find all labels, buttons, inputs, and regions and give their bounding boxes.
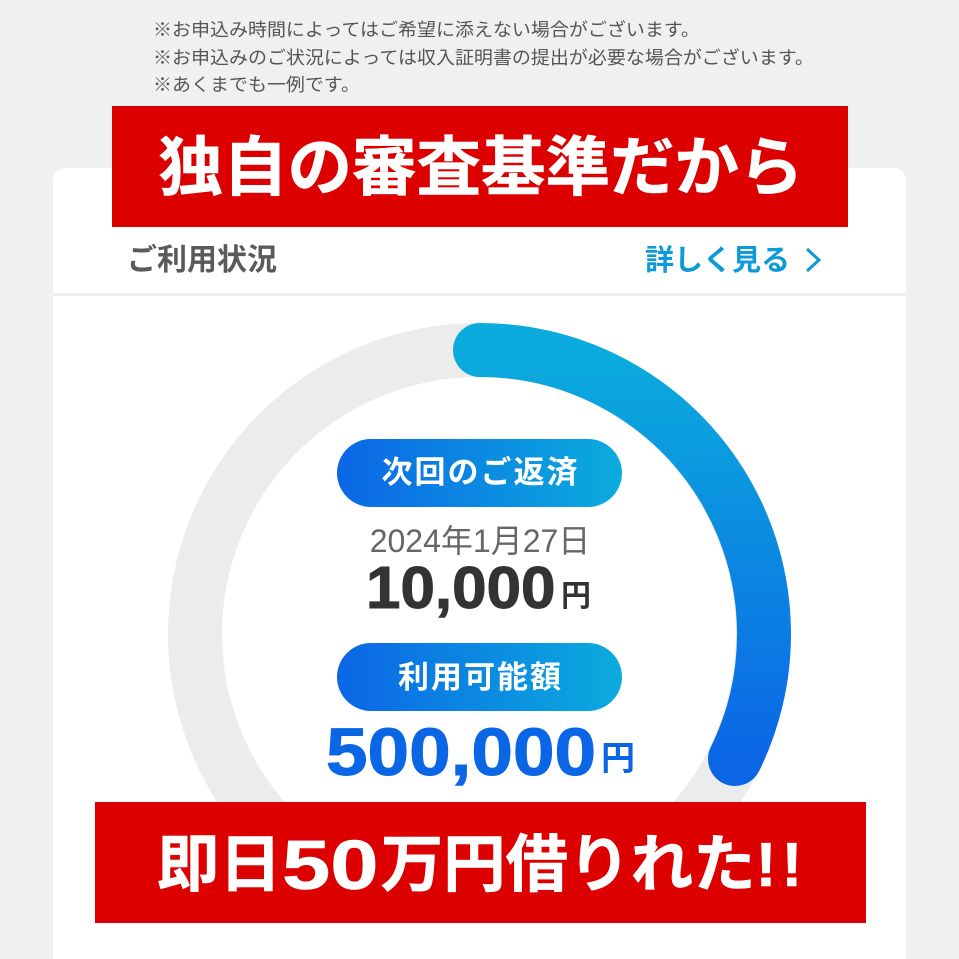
heading: usage status: ご利用状況	[127, 244, 277, 277]
pill: next repayment: 次回のご返済	[382, 455, 580, 490]
divider	[53, 293, 906, 296]
link: see details: 詳しく見る	[645, 245, 790, 277]
notes: disclaimers: ※お申込み時間によってはご希望に添えない場合がございます。	[153, 20, 700, 40]
notes: disclaimers: ※お申込みのご状況によっては収入証明書の提出が必要な場合がございます。	[153, 48, 814, 68]
banner: top headline: 独自の審査基準だから	[158, 132, 804, 204]
banner: top headline	[112, 106, 848, 227]
text: available amount: 円	[601, 740, 635, 778]
pill: next repayment	[337, 439, 622, 507]
icon: chevron	[806, 248, 822, 272]
text: repayment amount: 円	[561, 580, 591, 613]
banner: bottom headline: 50	[282, 826, 378, 904]
notes: disclaimers: ※あくまでも一例です。	[153, 75, 360, 95]
notes: disclaimers	[153, 20, 814, 95]
text: available amount: 500,000	[326, 715, 596, 790]
pill: available amount	[337, 643, 622, 711]
panel: usage card	[53, 168, 906, 959]
banner: bottom headline: 即日 万円借りれた!!	[157, 830, 807, 900]
text: repayment amount: 10,000	[366, 555, 555, 621]
banner: bottom headline	[95, 802, 866, 923]
text: date: 2024年1月27日	[370, 523, 590, 559]
pill: available amount: 利用可能額	[398, 660, 563, 695]
